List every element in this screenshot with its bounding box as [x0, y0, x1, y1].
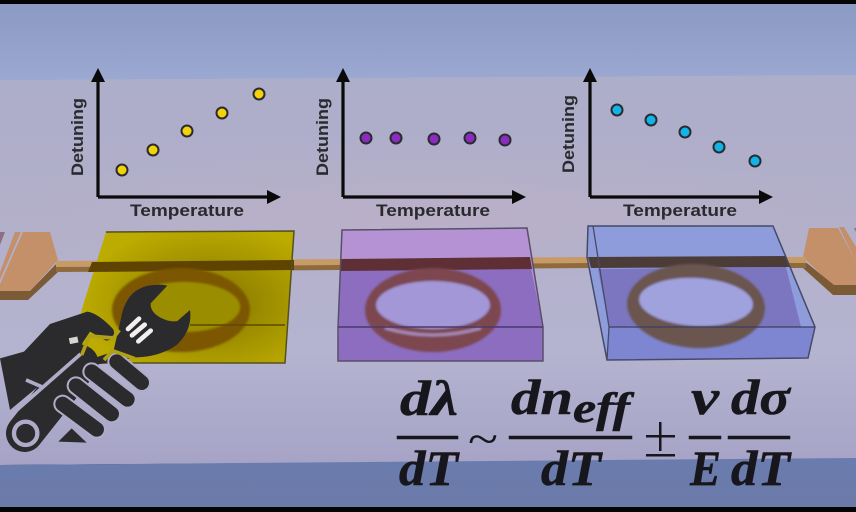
panel: blue cladding block — [587, 226, 815, 360]
palm triangle — [58, 428, 87, 443]
plus minus sign — [646, 422, 675, 456]
axes — [98, 78, 270, 197]
thumb nail — [69, 336, 79, 344]
effective index fraction: dT — [541, 440, 604, 496]
axes — [343, 78, 515, 197]
effective index fraction — [509, 369, 635, 496]
x label: Temperature — [376, 201, 490, 220]
left grating coupler — [0, 232, 58, 300]
ring resonator purple — [365, 268, 501, 352]
stress fraction: dσ — [731, 369, 792, 425]
right grating coupler — [803, 227, 856, 295]
chart: yellow detuning rising — [68, 68, 281, 220]
poisson ratio fraction: ν — [691, 369, 720, 425]
poisson ratio fraction: E — [689, 440, 721, 496]
wrench slots — [128, 319, 151, 341]
pink glow near waveguide — [0, 155, 856, 275]
top black border — [0, 0, 856, 4]
y label: Detuning — [68, 98, 87, 176]
data points — [360, 132, 510, 146]
bottom black border — [0, 507, 856, 512]
chart: purple detuning flat — [313, 68, 526, 220]
panel: purple cladding block — [338, 228, 543, 361]
hand gap line — [9, 354, 81, 417]
left fraction — [397, 370, 461, 496]
handle hole — [14, 422, 37, 445]
back blue band — [0, 4, 856, 80]
stress fraction: dT — [731, 440, 793, 496]
data points — [116, 88, 264, 176]
arrowheads — [583, 68, 773, 204]
arrowheads — [336, 68, 526, 204]
icon: hand holding wrench — [0, 285, 190, 445]
tilde: ~ — [468, 413, 498, 464]
finger outlines — [63, 362, 142, 429]
y label: Detuning — [559, 95, 578, 173]
poisson ratio fraction — [689, 369, 721, 496]
stress fraction — [728, 369, 793, 496]
effective index fraction: eff — [573, 386, 635, 432]
chart: blue detuning falling — [559, 68, 773, 220]
y label: Detuning — [313, 98, 332, 176]
equation — [397, 369, 793, 496]
wrench head — [83, 285, 190, 364]
thumb outline — [82, 330, 135, 360]
panel: yellow cladding block — [81, 231, 294, 363]
axes — [590, 78, 762, 197]
hand back — [0, 312, 114, 410]
lower blue band — [0, 458, 856, 507]
effective index fraction: dn — [511, 369, 573, 425]
wrench handle — [25, 363, 80, 433]
ring resonator yellow — [112, 268, 250, 352]
fingers — [63, 362, 142, 429]
left fraction: dλ — [400, 370, 458, 426]
x label: Temperature — [130, 201, 244, 220]
x label: Temperature — [623, 201, 737, 220]
chip surface — [0, 75, 856, 465]
data points — [612, 104, 760, 166]
waveguide — [56, 257, 806, 272]
ring resonator blue — [625, 260, 767, 352]
left fraction: dT — [399, 440, 461, 496]
arrowheads — [91, 68, 281, 204]
